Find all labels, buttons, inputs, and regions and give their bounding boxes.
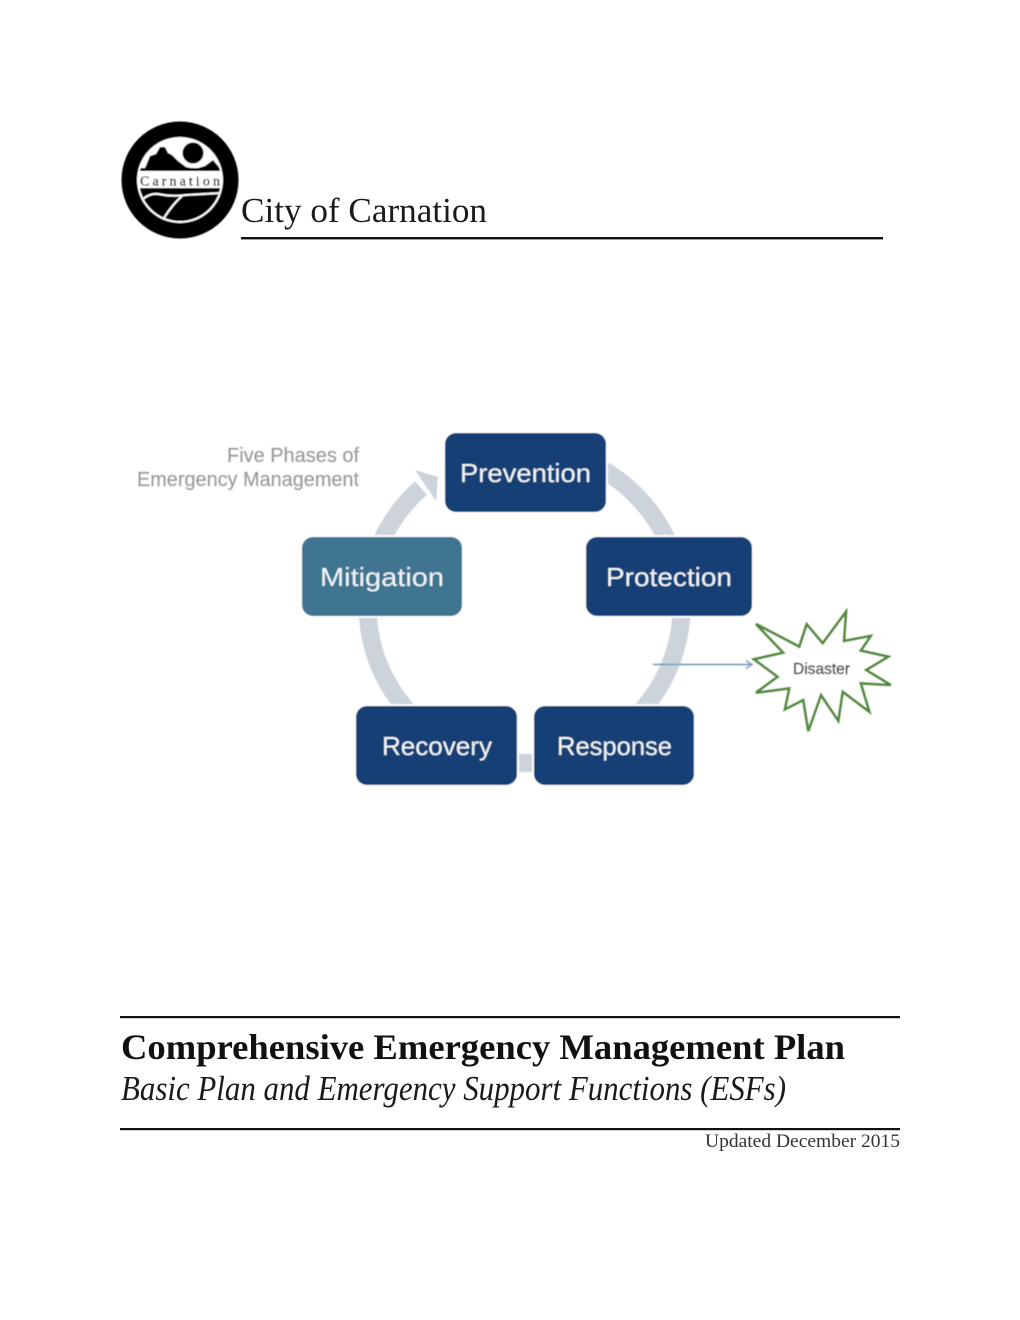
icon: City of Carnation seal <box>122 122 238 238</box>
top rule <box>120 1016 900 1018</box>
diagram: five phases of emergency management <box>137 433 891 785</box>
diagram caption <box>137 445 359 491</box>
diagram caption: Emergency Management <box>137 469 359 491</box>
header rule <box>241 237 883 239</box>
phase: Prevention: Prevention <box>460 458 591 488</box>
update date: Updated December 2015 <box>705 1131 900 1152</box>
city name: City of Carnation <box>241 191 487 230</box>
diagram caption: Five Phases of <box>227 445 359 467</box>
phase: Protection <box>586 537 752 616</box>
disaster burst <box>754 612 891 731</box>
phase: Response: Response <box>557 731 672 761</box>
phase: Response <box>534 706 694 785</box>
phase: Mitigation <box>302 537 462 616</box>
phase: Recovery <box>356 706 517 785</box>
bottom rule <box>120 1128 900 1130</box>
phase: Prevention <box>445 433 606 512</box>
cycle ring <box>368 449 682 763</box>
disaster burst: Disaster <box>793 661 851 678</box>
subtitle: Basic Plan and Emergency Support Functions (ESFs) <box>121 1069 786 1108</box>
header: logo and city name <box>122 122 883 239</box>
phase: Recovery: Recovery <box>382 731 492 761</box>
logo wordmark: Carnation <box>140 174 220 190</box>
phase: Protection: Protection <box>606 562 732 592</box>
main title: Comprehensive Emergency Management Plan <box>121 1027 845 1067</box>
arrow to disaster <box>653 660 752 668</box>
title block <box>120 1016 900 1152</box>
phase: Mitigation: Mitigation <box>320 562 444 592</box>
